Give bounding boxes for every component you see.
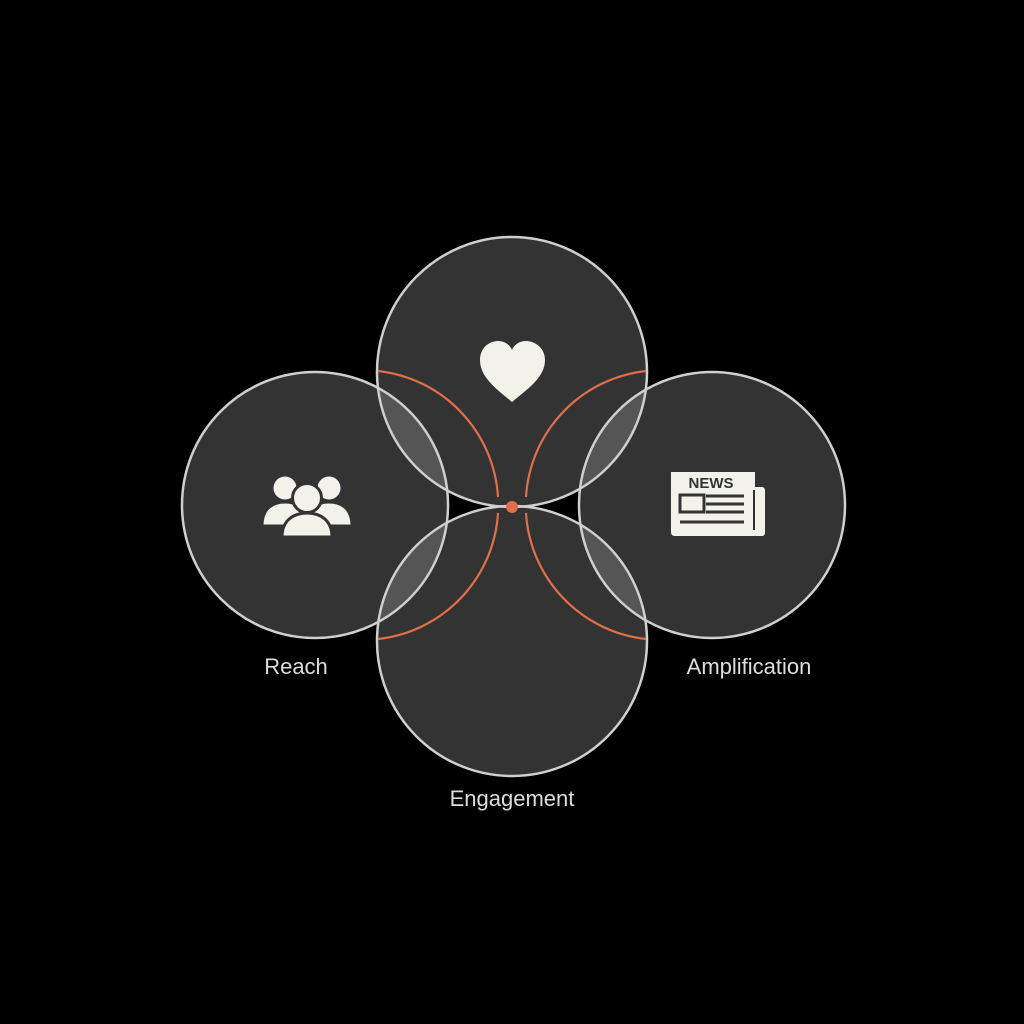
circle: reach	[182, 372, 448, 638]
icon: people	[262, 475, 352, 537]
overlap lenses	[380, 390, 644, 620]
center dot	[506, 501, 518, 513]
icon: newspaper	[671, 472, 765, 536]
label: Engagement: Engagement	[450, 786, 574, 811]
label: Reach: Reach	[264, 654, 328, 679]
label: Amplification: Amplification	[687, 654, 811, 679]
circle: engagement	[377, 506, 647, 776]
circle outlines	[182, 237, 845, 776]
circle: heart	[377, 237, 647, 507]
circle: amplification	[579, 372, 845, 638]
orange arcs	[378, 371, 646, 639]
icon: heart	[480, 341, 545, 402]
icon: newspaper: NEWS	[688, 475, 734, 492]
